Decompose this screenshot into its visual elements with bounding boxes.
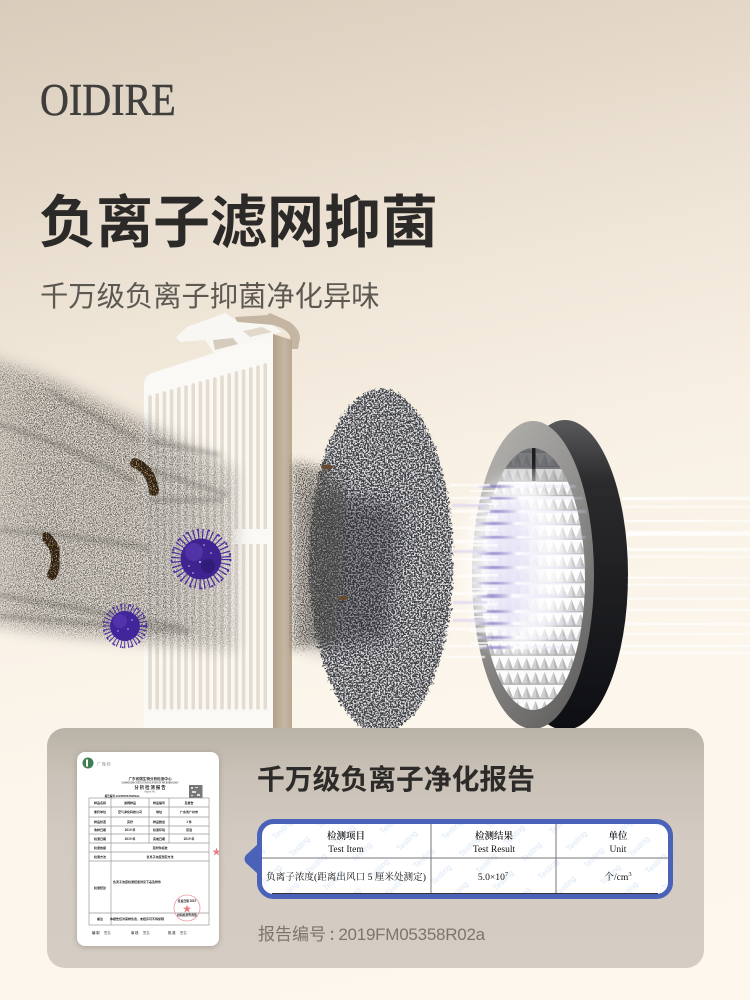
- report cell text: 样品编号: [153, 800, 165, 805]
- report cell text: 委托单位: [94, 809, 106, 814]
- table row text: 个/cm: [604, 872, 628, 883]
- title: 负离子滤网抑菌: [39, 177, 438, 259]
- report cell text: 见报告: [184, 800, 194, 805]
- report cell text: 2019 年: [184, 836, 194, 841]
- document header text: 广东省微生物分析检测中心: [128, 776, 172, 782]
- beams inside ring: [473, 485, 586, 649]
- report cell text: 完好: [127, 819, 133, 824]
- table header text: 检测项目: [327, 828, 365, 842]
- filter cover with slots: [144, 313, 300, 730]
- pleated media: [481, 448, 585, 710]
- top clip of filter: [176, 313, 300, 353]
- document header text: 报告编号 2019FM05358R02a: [105, 794, 140, 798]
- stripes across left of ring: [470, 490, 498, 644]
- black back rim: [502, 420, 628, 730]
- table frame: [260, 822, 670, 896]
- virus small: [104, 604, 146, 648]
- table header text: Test Item: [328, 845, 364, 855]
- callout pointer: [244, 843, 259, 875]
- report cell text: 样品名称: [94, 800, 106, 805]
- table row text: 负离子浓度(距离出风口 5 厘米处测定): [266, 871, 426, 883]
- report number: 报告编号 : 2019FM05358R02a: [258, 920, 485, 945]
- test result table callout: [244, 819, 673, 899]
- table row text: 5.0×10: [478, 872, 505, 883]
- dust stream behind foam: [292, 462, 345, 650]
- filter side face: [273, 334, 292, 730]
- qr code: [189, 785, 202, 798]
- report cell text: 检测日期: [94, 836, 106, 841]
- table header text: [327, 828, 628, 855]
- document header text: GUANGDONG DETECTION CENTER OF MICROBIOLOGY: [121, 780, 179, 784]
- virus large: [172, 530, 230, 588]
- signatures: 批 准: [168, 930, 176, 935]
- table header text: Test Result: [473, 845, 516, 855]
- report cell text: 常温: [186, 827, 192, 832]
- dark streaks in dust: [0, 392, 228, 632]
- red seal: ★: [182, 904, 192, 914]
- dark dust streaks on foam: [310, 490, 400, 650]
- document header text: 分 析 检 测 报 告: [134, 784, 166, 791]
- report cell text: 样品状态: [94, 819, 106, 824]
- lab logo: 广 微 检: [97, 760, 111, 768]
- report cell text: 空气净化科技公司: [118, 809, 142, 814]
- report cell text: 样品数量: [153, 819, 165, 824]
- table row text: [266, 871, 632, 883]
- captured particles: [321, 464, 348, 600]
- table grid: [262, 824, 668, 894]
- report cell text: 检测结论: [94, 885, 106, 890]
- report cell text: 本报告仅对来样负责，未经许可不得复制: [110, 916, 164, 921]
- document header text: [105, 776, 179, 798]
- subtitle: 千万级负离子抑菌净化异味: [40, 274, 380, 315]
- signatures: [92, 930, 187, 935]
- report cell text: 负离子浓度测定方法: [146, 854, 174, 859]
- report cell text: 2019 年: [125, 827, 135, 832]
- brand logo: OIDIRE: [40, 75, 176, 125]
- report cell text: 2019 年: [125, 836, 135, 841]
- report cell text: 收样日期: [94, 827, 106, 832]
- table header text: 检测结果: [475, 828, 513, 842]
- report panel: [47, 728, 704, 968]
- slot bridge: [232, 529, 273, 544]
- ring HEPA filter: [472, 420, 628, 730]
- top frame shadow and cross bar: [484, 448, 567, 540]
- lab logo: [82, 758, 111, 768]
- report cell text: 检测方法: [94, 854, 106, 859]
- test report document: [74, 751, 222, 950]
- bacterium upper: [135, 463, 154, 491]
- report cell text: 完成日期: [153, 836, 165, 841]
- beams between foam and ring: [445, 484, 490, 658]
- foam filter disc: [309, 389, 453, 733]
- table row text: 3: [628, 871, 632, 878]
- table header text: 单位: [608, 828, 628, 842]
- report cell text: 地址: [156, 809, 162, 814]
- signatures: 签名: [143, 930, 150, 935]
- report cell text: 见附件标准: [152, 845, 168, 850]
- red seal: 签发日期 2019: [178, 899, 197, 903]
- report cell text: 检测依据: [94, 845, 106, 850]
- report cell text: 广东省广州市: [180, 809, 198, 814]
- filter front face: [144, 334, 273, 730]
- signatures: 签名: [180, 930, 187, 935]
- beams right of ring: [620, 497, 750, 654]
- report cell text: 检测环境: [153, 827, 165, 832]
- vertical slots: [150, 365, 265, 708]
- table row text: 7: [505, 871, 509, 878]
- report cell text: 备注: [97, 916, 103, 921]
- report cell text: 1 件: [186, 819, 192, 824]
- report cell text: 滤网样品: [124, 800, 136, 805]
- report cell text: [94, 800, 198, 921]
- bacteria: [46, 463, 154, 575]
- report grid: [89, 798, 209, 925]
- document header text: Report No.: [145, 790, 156, 794]
- report heading: 千万级负离子净化报告: [257, 758, 535, 798]
- red seal: [174, 895, 200, 921]
- report cell text: 负离子浓度检测结果详见下表及附件: [113, 879, 161, 884]
- grey front ring: [472, 421, 594, 729]
- dust stream left of filter: [0, 355, 236, 650]
- bacterium lower: [46, 537, 56, 575]
- signatures: 签名: [104, 930, 111, 935]
- table header text: Unit: [610, 845, 627, 855]
- signatures: 审 核: [131, 930, 139, 935]
- signatures: 编 制: [92, 930, 100, 935]
- soft glow through filter: [466, 477, 570, 653]
- red seal: 检验检测专用章: [177, 913, 197, 917]
- clean air light beams: [445, 477, 750, 658]
- product illustration: [0, 313, 750, 728]
